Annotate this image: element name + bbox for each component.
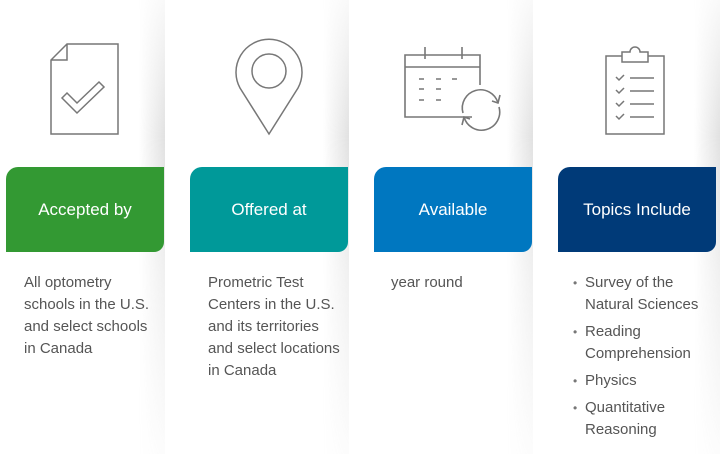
panel: offered at bbox=[190, 38, 348, 379]
icon: clipboard checklist bbox=[605, 46, 665, 135]
text: topics list bbox=[574, 274, 698, 438]
tab: accepted by: Accepted by bbox=[38, 200, 132, 218]
text: topics list: Natural Sciences bbox=[585, 296, 698, 313]
text: offered at: and select locations bbox=[208, 340, 340, 357]
text: topics list: Quantitative bbox=[585, 399, 665, 416]
icon: location pin bbox=[235, 38, 303, 136]
text: available: year round bbox=[391, 274, 463, 291]
panel: available bbox=[374, 47, 532, 291]
icon: calendar refresh bbox=[404, 47, 501, 131]
text: offered at bbox=[208, 274, 340, 379]
text: accepted by: and select schools bbox=[24, 318, 147, 335]
text: accepted by: All optometry bbox=[24, 274, 112, 291]
tab: topics include: Topics Include bbox=[583, 200, 691, 218]
tab: available: Available bbox=[419, 200, 487, 218]
icon: document check bbox=[50, 43, 119, 135]
text: accepted by: schools in the U.S. bbox=[24, 296, 149, 313]
text: offered at: in Canada bbox=[208, 362, 276, 379]
text: topics list: Physics bbox=[585, 372, 637, 389]
tab: topics include bbox=[558, 167, 716, 252]
text: offered at: and its territories bbox=[208, 318, 319, 335]
text: topics list: Comprehension bbox=[585, 345, 691, 362]
text: topics list: Reading bbox=[585, 323, 641, 340]
text: topics list: Survey of the bbox=[585, 274, 673, 291]
text: offered at: Centers in the U.S. bbox=[208, 296, 335, 313]
tab: available bbox=[374, 167, 532, 252]
text: offered at: Prometric Test bbox=[208, 274, 304, 291]
tab: accepted by bbox=[6, 167, 164, 252]
tab: offered at: Offered at bbox=[231, 200, 307, 218]
text: topics list: Reasoning bbox=[585, 421, 657, 438]
text: accepted by bbox=[24, 274, 149, 357]
tab: offered at bbox=[190, 167, 348, 252]
panel: topics bbox=[558, 46, 716, 438]
panel: accepted by bbox=[6, 43, 164, 357]
text: accepted by: in Canada bbox=[24, 340, 92, 357]
